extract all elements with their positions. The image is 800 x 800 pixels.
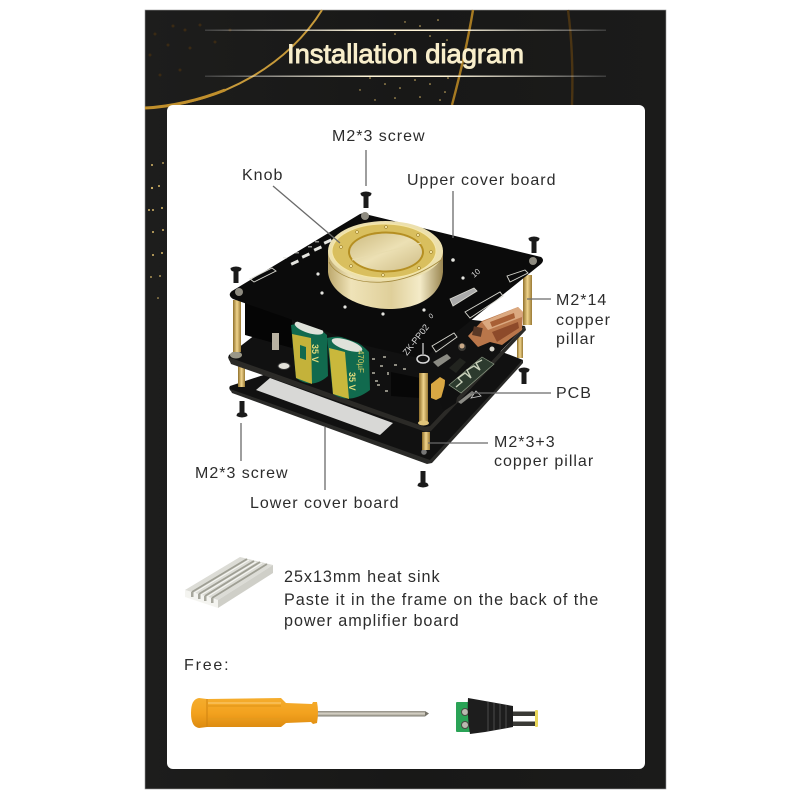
background panel: [145, 10, 666, 789]
PCB board: [228, 300, 526, 432]
PCB components: [372, 307, 523, 411]
heat sink text: [284, 568, 599, 630]
upper cover board: 0: [428, 313, 435, 321]
title banner: Installation diagram: [287, 39, 524, 69]
label: bottom screw: M2*3 screw: [195, 465, 289, 482]
upper cover board: 10: [470, 267, 483, 280]
icon: heat sink: [185, 557, 273, 608]
label: upper cover board: Upper cover board: [407, 172, 557, 189]
icon: DC power connector: [456, 698, 538, 734]
electrolytic capacitors: 35 V: [310, 344, 320, 363]
electrolytic capacitors: [291, 319, 370, 399]
heat sink text: power amplifier board: [284, 612, 460, 630]
lower cover board: [229, 322, 523, 464]
free heading: Free:: [184, 657, 230, 674]
icon: screwdriver: [191, 698, 429, 728]
electrolytic capacitors: 470µF: [356, 350, 365, 373]
label: M2*14 copper pillar: [527, 292, 611, 348]
label: lower cover board: Lower cover board: [250, 495, 400, 512]
label: M2*14 copper pillar: copper: [556, 312, 611, 329]
M2*3 screws: [230, 192, 540, 488]
label: PCB: PCB: [556, 385, 592, 402]
white content panel: [167, 105, 645, 769]
label: M2*14 copper pillar: pillar: [556, 331, 596, 348]
product exploded view: [228, 212, 543, 464]
upper cover board: [230, 212, 543, 363]
label: M2*3+3 copper pillar: copper pillar: [494, 453, 594, 470]
label: PCB: [470, 385, 592, 402]
heat sink text: 25x13mm heat sink: [284, 568, 441, 586]
label: knob: Knob: [242, 167, 283, 184]
label: top screw: M2*3 screw: [332, 128, 426, 145]
label: knob: [242, 167, 340, 243]
lower pillars: [238, 337, 523, 450]
upper cover board: ZK-PP02: [401, 322, 431, 357]
label: bottom screw: [195, 423, 289, 482]
electrolytic capacitors: 35 V: [347, 372, 357, 391]
copper pillars upper: [233, 275, 532, 426]
label: M2*14 copper pillar: M2*14: [556, 292, 607, 309]
heat sink text: Paste it in the frame on the back of the: [284, 591, 599, 609]
label: M2*3+3 copper pillar: [428, 434, 594, 470]
label: M2*3+3 copper pillar: M2*3+3: [494, 434, 556, 451]
gold knob: [328, 221, 443, 309]
label: top screw: [332, 128, 426, 186]
